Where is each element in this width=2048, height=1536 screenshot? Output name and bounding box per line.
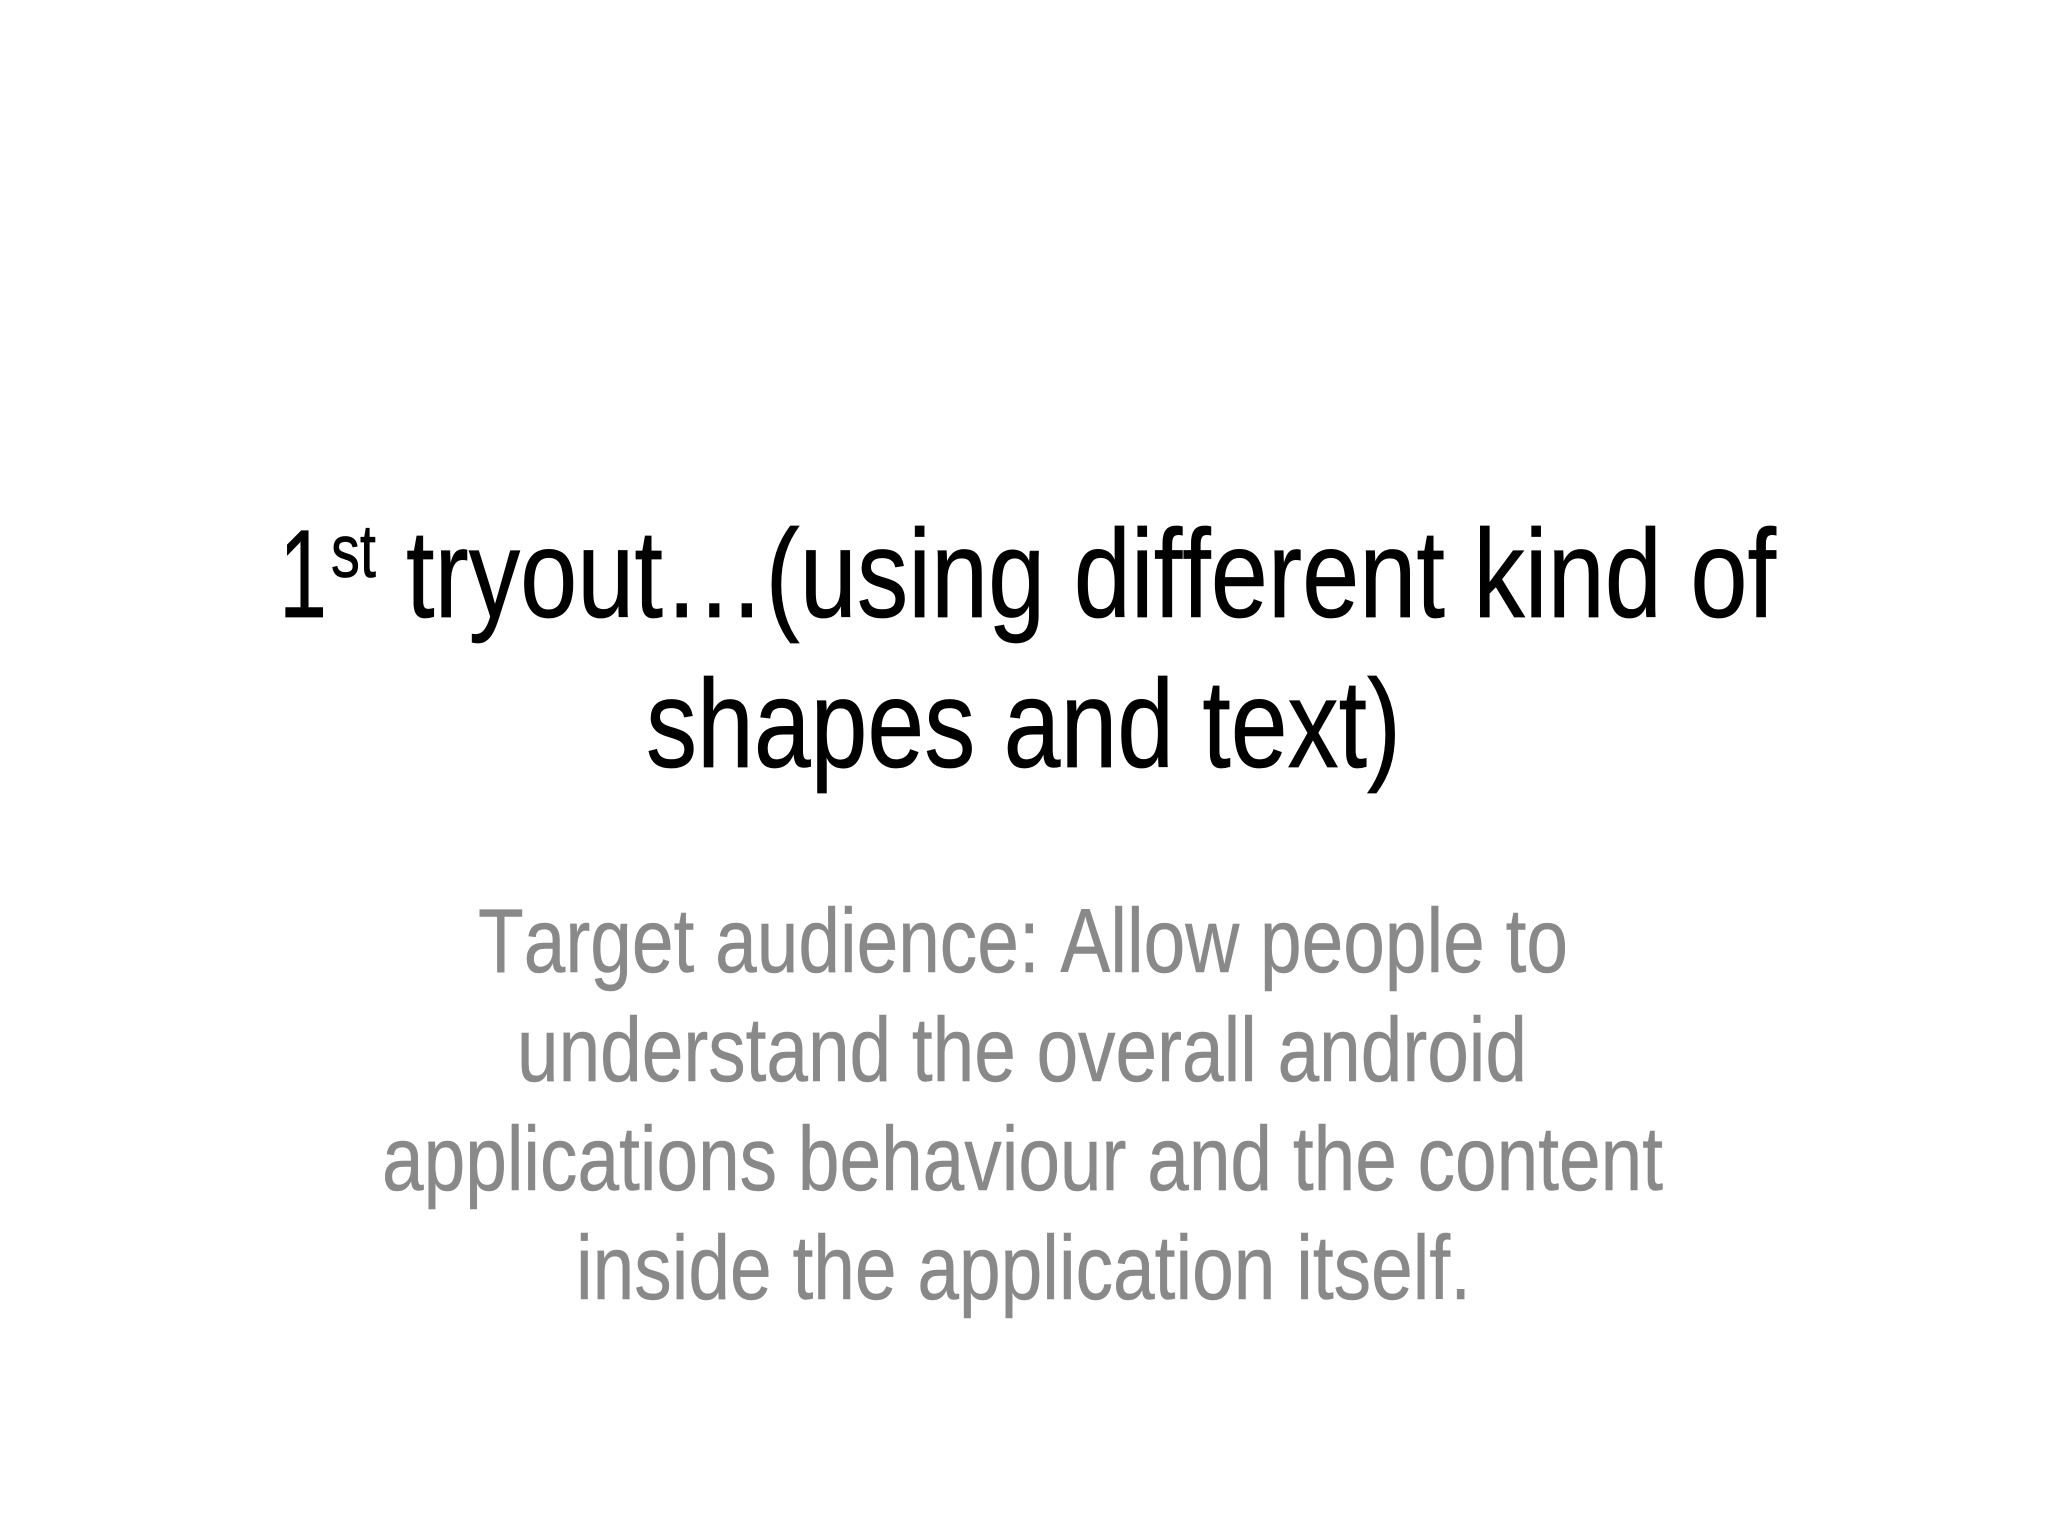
title: tryout…(using different kind of xyxy=(406,505,1776,644)
subtitle: target audience xyxy=(382,891,1663,1319)
title: 1 xyxy=(279,505,327,644)
title: shapes and text) xyxy=(646,655,1401,794)
subtitle: target audience: Target audience: Allow people to xyxy=(478,891,1568,992)
title xyxy=(279,505,1776,794)
title: st xyxy=(331,509,376,593)
subtitle: target audience: applications behaviour and the content xyxy=(382,1109,1663,1210)
subtitle: target audience: understand the overall android xyxy=(517,1000,1527,1101)
subtitle: target audience: inside the application itself. xyxy=(576,1218,1471,1319)
